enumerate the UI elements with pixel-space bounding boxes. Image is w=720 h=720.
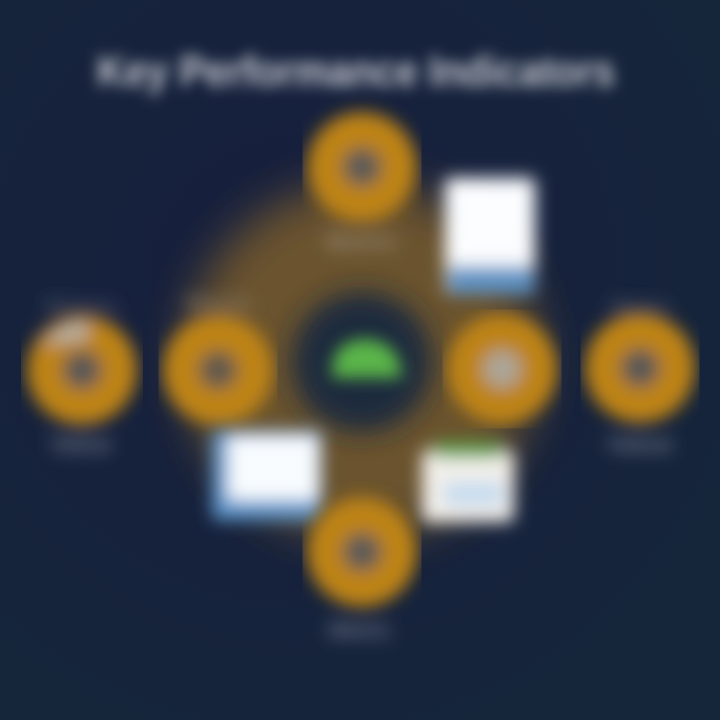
donut: far right <box>603 296 677 458</box>
donut: bottom: Metric <box>329 617 391 644</box>
donut: far left: Metric <box>44 296 120 315</box>
white card: upper right <box>445 178 535 294</box>
central hub <box>292 292 432 432</box>
donut: far right: Metric <box>609 296 671 315</box>
donut: inner left: Metric <box>186 293 254 315</box>
donut: inner left <box>181 293 255 407</box>
donut: bottom <box>325 515 399 644</box>
donut: far right: Value <box>607 431 673 458</box>
central glow disc <box>186 184 538 536</box>
title: Key Performance Indicators <box>97 47 615 96</box>
hub disc <box>292 292 432 432</box>
donut: top <box>325 130 399 256</box>
white card: lower left <box>212 430 322 520</box>
donut: far left: Value <box>50 431 112 458</box>
icon: green cloud <box>332 339 402 378</box>
donut: inner right <box>465 332 539 406</box>
donut: far left <box>44 296 120 458</box>
white card: lower right <box>422 442 514 522</box>
donut: top: Metric <box>325 229 399 256</box>
